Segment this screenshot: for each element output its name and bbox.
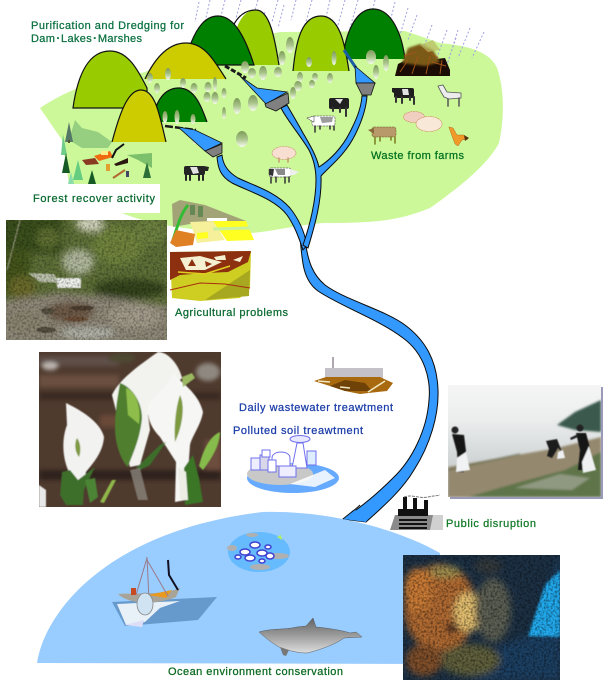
illustration: forest recovery work: [61, 120, 152, 184]
heading: dam, lakes, marshes: Dam･Lakes･Marshes: [31, 33, 142, 45]
icon: compost heap: [395, 40, 450, 76]
photo texture: stream: [6, 220, 167, 340]
excavator: [94, 144, 128, 166]
icon: pig pale: [272, 146, 296, 162]
icon: dam right: [344, 50, 375, 95]
icon: cow white lower: [269, 168, 299, 183]
illustration: sea pollution fish school: [227, 532, 290, 572]
group: rivers: [217, 96, 438, 522]
icon: dam upper: [225, 66, 289, 111]
group: mountains: [73, 9, 405, 142]
label: polluted soil treatment: Polluted soil treawtment: [233, 425, 363, 437]
icon: cow white center: [307, 116, 335, 132]
icon: cow dark center: [329, 98, 349, 116]
icon: dam lower: [165, 126, 222, 157]
river: west branch: [217, 155, 307, 250]
photo: beach cleanup: [448, 385, 603, 499]
mountain: lime left: [73, 51, 147, 108]
heading: purification and dredging: Purification and Dredging for: [31, 20, 184, 32]
back flower: [112, 352, 182, 467]
mountain: lime right: [293, 16, 349, 71]
illustration: farm fields: [170, 200, 254, 247]
mountain: dark green lower: [153, 88, 207, 122]
person right: [570, 424, 596, 473]
photo: mountain stream: [6, 220, 167, 340]
illustration: polluted soil treatment plant: [247, 436, 339, 493]
tree row: [61, 122, 151, 184]
mountain: dark green center: [191, 16, 254, 65]
label: waste from farms: Waste from farms: [371, 150, 464, 162]
label: daily wastewater treatment: Daily wastewater treawtment: [239, 402, 393, 414]
mountain: olive lower: [112, 90, 166, 142]
icon: goat: [438, 85, 461, 106]
photo texture: coral: [403, 555, 560, 680]
person center: [546, 439, 565, 459]
icon: factory: [390, 495, 443, 530]
illustration: dolphin: [259, 618, 362, 656]
group: farm animals: [184, 85, 469, 183]
mountain: far dark green right: [343, 9, 405, 59]
icon: chicken: [449, 127, 469, 146]
label box: forest recover activity: Forest recover activity: [33, 193, 156, 205]
photo: white skunk cabbage flowers: [39, 352, 221, 507]
icon: cow brown: [368, 127, 396, 144]
icon: pig cream: [416, 116, 442, 132]
river: main channel: [300, 236, 438, 522]
photo: coral reef: [403, 555, 560, 680]
panel: ocean: [37, 512, 440, 664]
label: ocean environment conservation: Ocean environment conservation: [168, 666, 343, 678]
photo shadow: [450, 387, 603, 499]
mountain: olive center: [145, 43, 226, 79]
front right flower: [148, 373, 203, 502]
left flower: [62, 402, 105, 481]
mountain ridge: lime center: [233, 10, 279, 65]
icon: rain: [195, 0, 484, 70]
illustration: fishing boat with net: [112, 557, 217, 627]
label: public disruption: Public disruption: [446, 518, 536, 530]
icon: cow dark right: [392, 88, 414, 104]
river: middle branch: [281, 96, 367, 248]
icon: pig pink: [404, 112, 424, 122]
group: forest trees: [147, 37, 389, 147]
illustration: wastewater treatment plant: [314, 357, 393, 394]
label: agricultural problems: Agricultural problems: [175, 307, 288, 319]
panel: land area: [40, 31, 503, 233]
river mouth overlap: [343, 510, 372, 522]
icon: cow lower dark: [184, 166, 209, 180]
illustration: eroded soil: [170, 251, 251, 301]
label box: forest recover activity: [32, 184, 160, 213]
mountain: lime center: [233, 10, 279, 65]
person left: [452, 426, 470, 472]
illustration: agricultural problems: [170, 200, 254, 301]
